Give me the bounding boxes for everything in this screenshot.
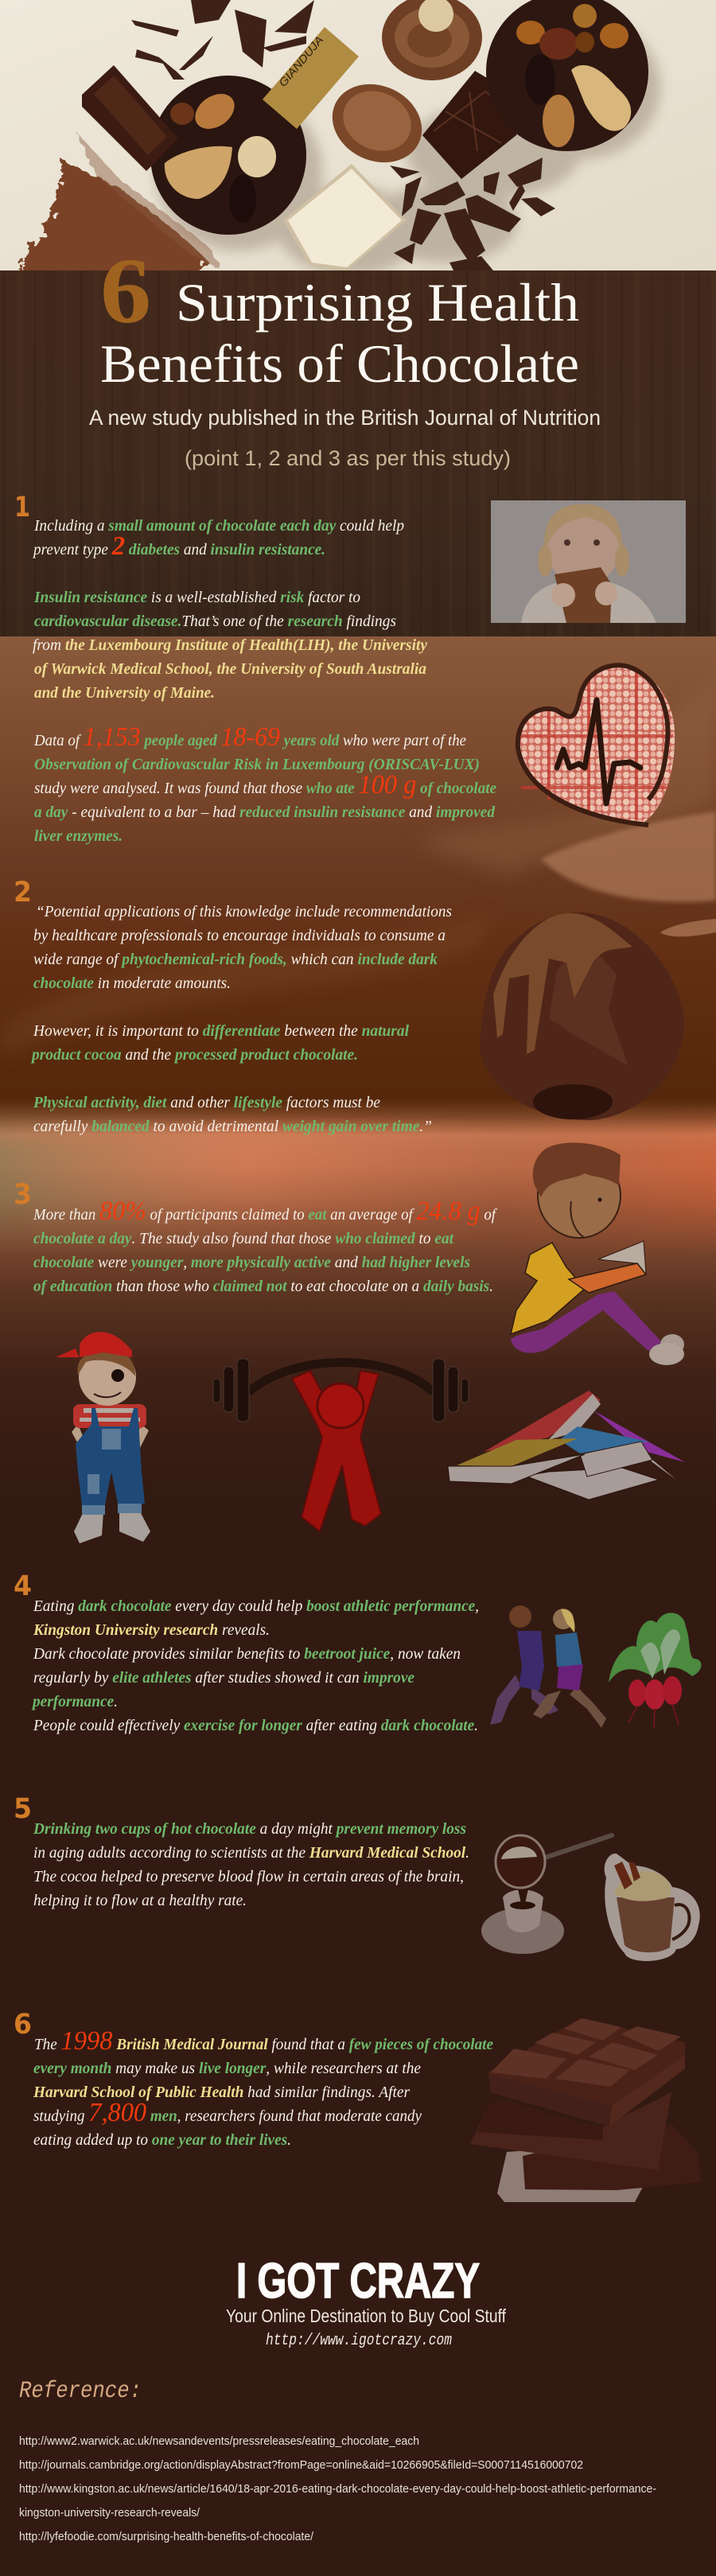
number 1: 1 (14, 492, 30, 523)
reference links: http://journals.cambridge.org/action/displayAbstract?fromPage=online&aid=10266905&fileId=S0007114516000702 (19, 2458, 583, 2472)
wood background panel (0, 270, 716, 636)
section 3 text (33, 1197, 497, 1295)
soft shadows under the chocolates (155, 16, 660, 274)
website url: http://www.igotcrazy.com (266, 2332, 452, 2350)
section 4 text: performance. (31, 1693, 118, 1710)
reference heading: Reference: (19, 2378, 142, 2405)
photo: stacked chocolate bars (470, 2018, 701, 2202)
oval milk chocolate (320, 70, 434, 177)
section 4 text: regularly by elite athletes after studies showed it can improve (33, 1669, 414, 1687)
reference links: http://www.kingston.ac.uk/news/article/1640/18-apr-2016-eating-dark-chocolate-every-day-could-help-boost-athletic-performance- (19, 2482, 656, 2496)
section 1 text: cardiovascular disease.That’s one of the research findings (34, 613, 396, 630)
illustration: hot chocolate mug (605, 1854, 700, 1961)
illustration: cocoa pouring from spoon into cup (481, 1835, 612, 1954)
section 1 text: from the Luxembourg Institute of Health(LIH), the University (33, 636, 427, 654)
chocolate truffle image (480, 912, 684, 1120)
section 1 text: Insulin resistance is a well-established risk factor to (33, 589, 360, 606)
section 3 text: chocolate were younger, more physically active and had higher levels (33, 1254, 470, 1271)
section 2 text: chocolate in moderate amounts. (33, 975, 231, 992)
illustration: pile of books (448, 1391, 685, 1500)
number 5: 5 (14, 1793, 32, 1825)
gold Gianduja bar (263, 27, 359, 129)
section 3 text: of education than those who claimed not to eat chocolate on a daily basis. (33, 1278, 493, 1295)
illustration: red figure lifting barbell (213, 1359, 469, 1531)
section 2 text: wide range of phytochemical-rich foods, which can include dark (33, 951, 438, 968)
section 1 text: a day - equivalent to a bar – had reduced insulin resistance and improved (34, 804, 496, 821)
section 4 text: Dark chocolate provides similar benefits to beetroot juice, now taken (33, 1645, 461, 1663)
section 2 text: carefully balanced to avoid detrimental weight gain over time.” (33, 1118, 432, 1135)
section 5 text (33, 1820, 469, 1909)
white chocolate (283, 164, 407, 270)
section 4 text: People could effectively exercise for longer after eating dark chocolate. (33, 1717, 478, 1734)
number 6: 6 (14, 2009, 32, 2041)
section 1 text: study were analysed. It was found that those who ate 100 g of chocolate (34, 770, 496, 800)
swirl chocolate with hazelnut (382, 0, 482, 80)
section 6 text: eating added up to one year to their lives. (33, 2131, 291, 2149)
section 2 text: However, it is important to differentiate between the natural (33, 1022, 409, 1040)
section 5 text: Drinking two cups of hot chocolate a day might prevent memory loss (33, 1820, 466, 1838)
section 4 text: Eating dark chocolate every day could help boost athletic performance, (33, 1597, 479, 1615)
section 2 text: Physical activity, diet and other lifestyle factors must be (33, 1094, 380, 1111)
title: 6 (100, 239, 151, 343)
section 1 text: of Warwick Medical School, the University of South Australia (34, 660, 426, 678)
illustration: beetroot (609, 1613, 702, 1728)
reference links: kingston-university-research-reveals/ (19, 2506, 200, 2520)
photo: assorted chocolates (0, 0, 716, 274)
section 4 text (31, 1597, 479, 1734)
title (100, 239, 579, 394)
number 3: 3 (14, 1179, 32, 1211)
section 1 text (32, 517, 496, 845)
chocolate bar (82, 65, 178, 171)
section 1 text: Including a small amount of chocolate each day could help (33, 517, 404, 535)
section 2 text: product cocoa and the processed product chocolate. (30, 1046, 358, 1064)
right disc with nuts (486, 0, 648, 151)
page background (0, 636, 716, 1426)
gold Gianduja bar: GIANDUJA (276, 33, 325, 89)
title: Surprising Health (176, 272, 579, 333)
section 1 text: Observation of Cardiovascular Risk in Luxembourg (ORISCAV-LUX) (34, 756, 480, 773)
section 2 text (30, 903, 452, 1135)
dark block (422, 71, 530, 179)
title: Benefits of Chocolate (100, 333, 579, 394)
cocoa powder (18, 131, 223, 274)
section 2 text: “Potential applications of this knowledge include recommendations (36, 903, 452, 920)
illustration: boy reading book (511, 1142, 684, 1365)
illustration: two runners (490, 1605, 606, 1728)
section 5 text: helping it to flow at a healthy rate. (33, 1892, 247, 1909)
subtitle: A new study published in the British Journal of Nutrition (89, 406, 601, 430)
tagline: Your Online Destination to Buy Cool Stuff (226, 2306, 507, 2326)
brand logo: I GOT CRAZY (236, 2254, 480, 2309)
icon: gingham heart with pulse (518, 665, 675, 825)
dark disc with nuts (150, 76, 306, 235)
section 5 text: in aging adults according to scientists at the Harvard Medical School. (33, 1844, 469, 1862)
section 6 text: The 1998 British Medical Journal found that a few pieces of chocolate (34, 2026, 493, 2056)
section 6 text (33, 2026, 493, 2149)
section 2 text: by healthcare professionals to encourage individuals to consume a (33, 927, 446, 944)
chocolate shards (131, 0, 555, 270)
section 6 text: Harvard School of Public Health had similar findings. After (33, 2084, 410, 2101)
photo: girl eating chocolate (491, 500, 686, 623)
section 5 text: The cocoa helped to preserve blood flow in certain areas of the brain, (33, 1868, 464, 1885)
section 1 text: and the University of Maine. (34, 684, 215, 702)
section 4 text: Kingston University research reveals. (33, 1621, 270, 1639)
study note: (point 1, 2 and 3 as per this study) (185, 446, 511, 470)
reference links: http://www2.warwick.ac.uk/newsandevents/pressreleases/eating_chocolate_each (19, 2434, 419, 2448)
section 6 text: every month may make us live longer, while researchers at the (33, 2060, 421, 2077)
section 6 text: studying 7,800 men, researchers found that moderate candy (33, 2098, 422, 2127)
reference links: http://lyfefoodie.com/surprising-health-benefits-of-chocolate/ (19, 2530, 314, 2543)
number 2: 2 (14, 877, 32, 909)
section 3 text: chocolate a day. The study also found that those who claimed to eat (33, 1230, 454, 1247)
section 1 text: liver enzymes. (34, 827, 123, 845)
section 1 text: Data of 1,153 people aged 18-69 years old who were part of the (33, 722, 466, 752)
illustration: winking boy in overalls (56, 1332, 150, 1543)
number 4: 4 (14, 1570, 32, 1602)
section 3 text: More than 80% of participants claimed to eat an average of 24.8 g of (33, 1197, 497, 1226)
reference links (19, 2434, 656, 2543)
section 1 text: prevent type 2 diabetes and insulin resistance. (32, 531, 325, 561)
